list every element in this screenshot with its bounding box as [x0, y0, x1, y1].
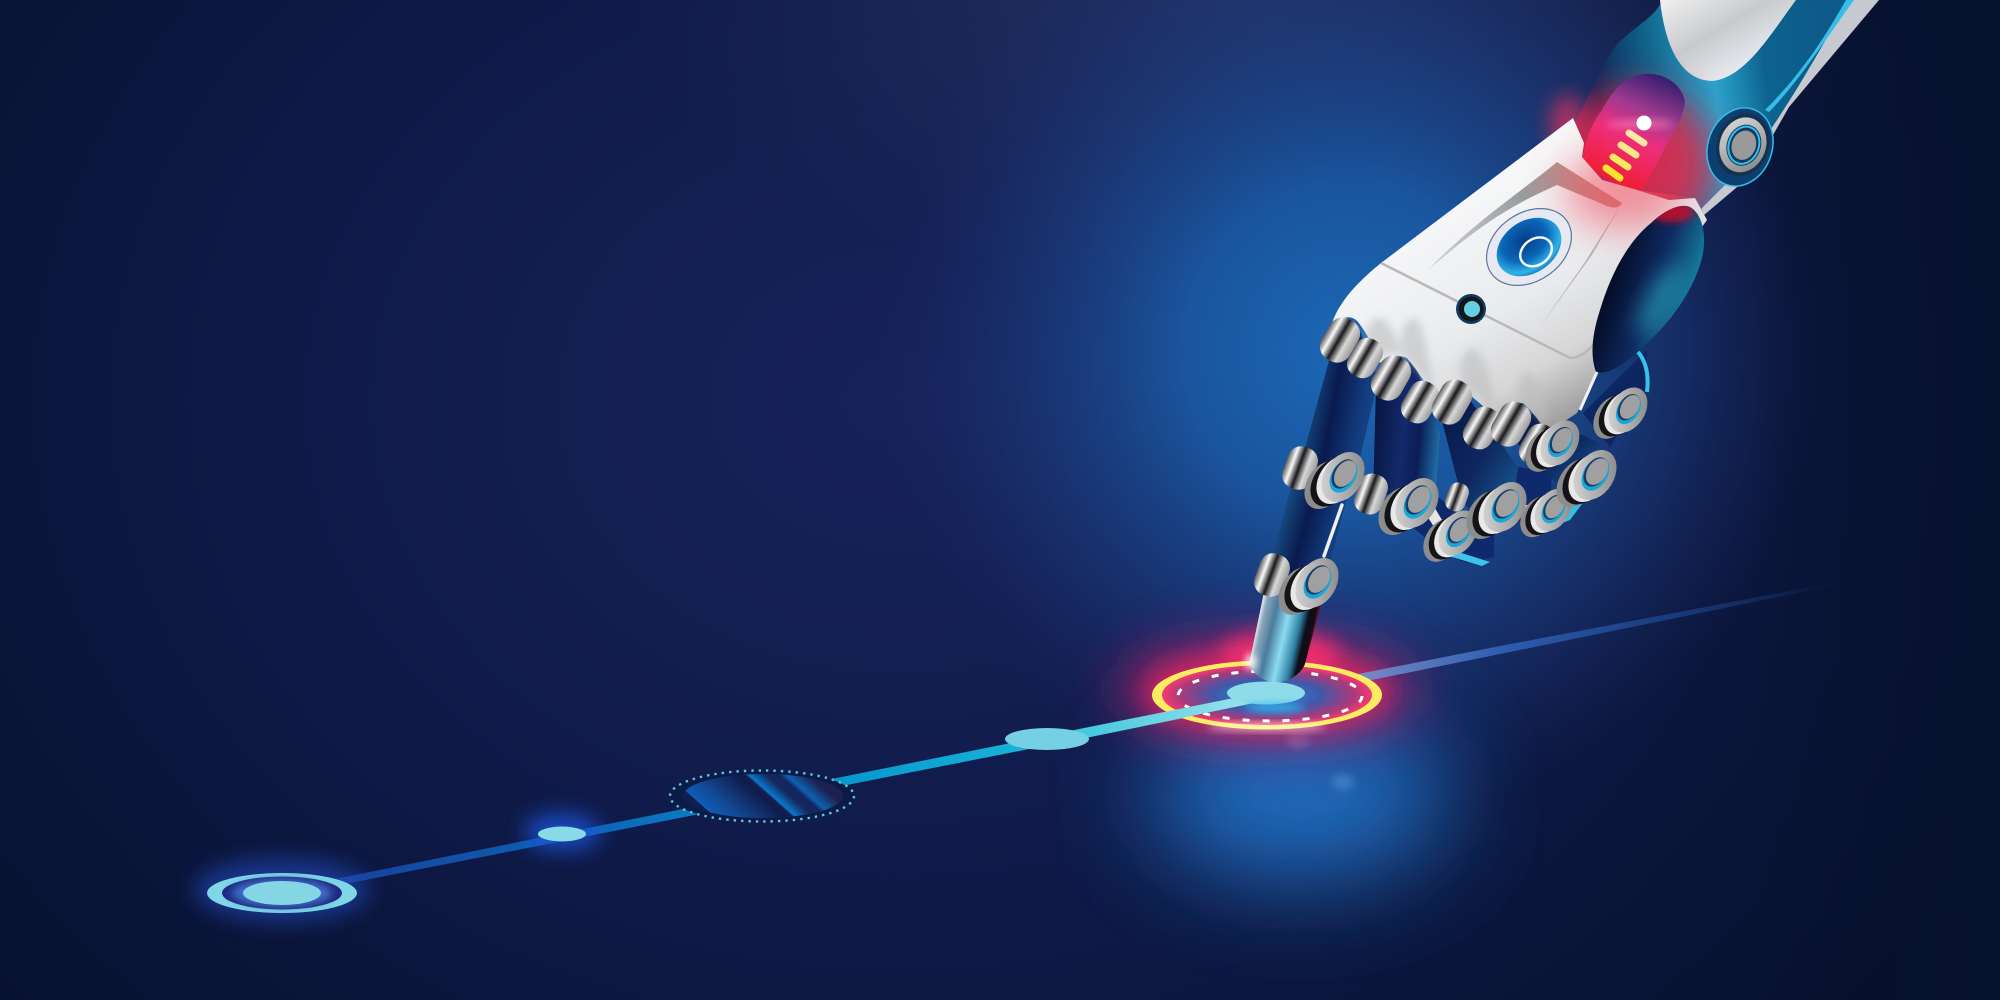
LED level bars — [1606, 133, 1644, 178]
node: start ring — [194, 858, 370, 922]
touch ring — [1047, 660, 1382, 746]
palm small indicator — [1456, 294, 1486, 324]
little finger — [1510, 413, 1610, 497]
fingertip spark — [1246, 654, 1256, 670]
red glow on palm — [1565, 150, 1685, 230]
palm — [1332, 118, 1707, 433]
palm recess right edge — [1539, 203, 1622, 328]
glow: blue light pool under the touch point — [1150, 710, 1450, 880]
node: flat cyan ellipse — [1005, 728, 1089, 750]
forearm grey strip — [1695, 0, 1879, 215]
indicator window — [1582, 74, 1685, 191]
hidden pinky finger behind palm — [1583, 350, 1648, 447]
white status light — [1606, 116, 1674, 130]
node: dotted oval with blue stripes — [670, 770, 854, 822]
seam line — [1381, 263, 1593, 358]
forearm cyan trim — [1765, 0, 1854, 112]
palm round button — [1472, 193, 1586, 301]
red glow on forearm — [1555, 90, 1715, 240]
knuckle ridges — [1365, 318, 1547, 428]
node: small glowing dot — [524, 813, 600, 851]
palm recess — [1428, 162, 1622, 270]
fingertip cylinder — [1250, 592, 1322, 682]
robot forearm — [1575, 0, 1879, 215]
forearm white cover — [1660, 0, 1796, 81]
thumb — [1580, 202, 1704, 410]
arm button — [1696, 98, 1784, 196]
finger joint discs — [1270, 380, 1655, 623]
glow: red halo around the touch ring — [1117, 631, 1417, 740]
index finger — [1246, 323, 1378, 682]
timeline line — [330, 582, 1837, 887]
knuckle joints along palm edge — [1250, 312, 1562, 601]
ring finger — [1440, 390, 1585, 530]
forearm blue shell — [1573, 0, 1848, 210]
red glow behind wrist — [1550, 95, 1586, 155]
middle finger — [1373, 360, 1494, 566]
